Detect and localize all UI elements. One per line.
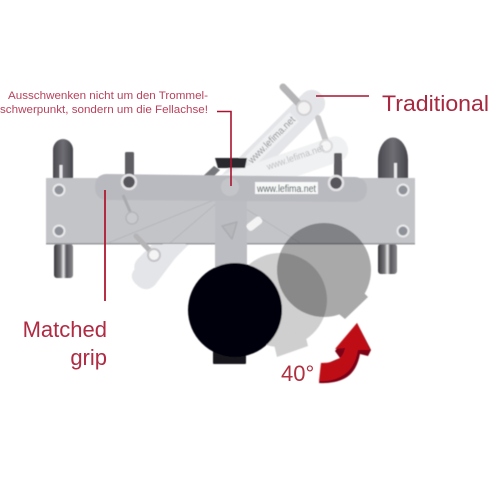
40 degree label: 40° bbox=[281, 361, 314, 386]
slot bbox=[245, 215, 264, 232]
right hook handle bbox=[378, 138, 408, 178]
faint bolt on plate bbox=[123, 195, 138, 224]
stem diamond detail bbox=[222, 222, 237, 239]
axle circle bbox=[221, 178, 239, 196]
Traditional label: Traditional bbox=[382, 91, 489, 116]
drum mount device bbox=[46, 85, 415, 383]
ghost bolt lower bbox=[136, 236, 154, 255]
matched grip bar bbox=[95, 174, 367, 202]
ghost label: www.lefima.net bbox=[265, 143, 326, 173]
top clamp bbox=[201, 158, 247, 183]
ghost arm 20 degrees bbox=[206, 118, 351, 205]
lower left ghost arm tip bbox=[132, 236, 186, 289]
Matched grip label bbox=[23, 317, 107, 370]
drum ghost 40 degrees bbox=[277, 223, 371, 319]
German annotation: Ausschwenken nicht um den Trommel- bbox=[8, 90, 208, 102]
Matched grip leader line bbox=[104, 190, 106, 301]
base plate bbox=[46, 178, 415, 244]
German annotation bbox=[0, 90, 208, 116]
black drum bbox=[188, 263, 282, 364]
ghost bolt upper bbox=[283, 87, 311, 115]
Matched grip label: grip bbox=[70, 345, 107, 370]
annotation leader line bbox=[217, 112, 231, 186]
ghost bolt bbox=[318, 118, 332, 152]
lower right cylinder bbox=[378, 244, 397, 274]
ghost arm 40 degrees bbox=[129, 85, 330, 286]
lower left cylinder bbox=[54, 244, 73, 278]
left hook handle bbox=[53, 139, 73, 178]
website label: www.lefima.net bbox=[256, 184, 316, 195]
German annotation: schwerpunkt, sondern um die Fellachse! bbox=[0, 104, 208, 116]
Traditional leader line bbox=[316, 95, 369, 97]
Matched grip label: Matched bbox=[23, 317, 107, 342]
drum ghost 20 degrees bbox=[233, 253, 327, 357]
ghost label: www.lefima.net bbox=[246, 114, 298, 167]
vertical stem bbox=[215, 200, 247, 268]
left bolt bbox=[122, 152, 136, 189]
right bolt bbox=[329, 153, 343, 190]
ghost arm outlines on plate bbox=[108, 190, 300, 243]
plate screws bbox=[54, 184, 408, 236]
rotation arrow bbox=[319, 323, 371, 383]
